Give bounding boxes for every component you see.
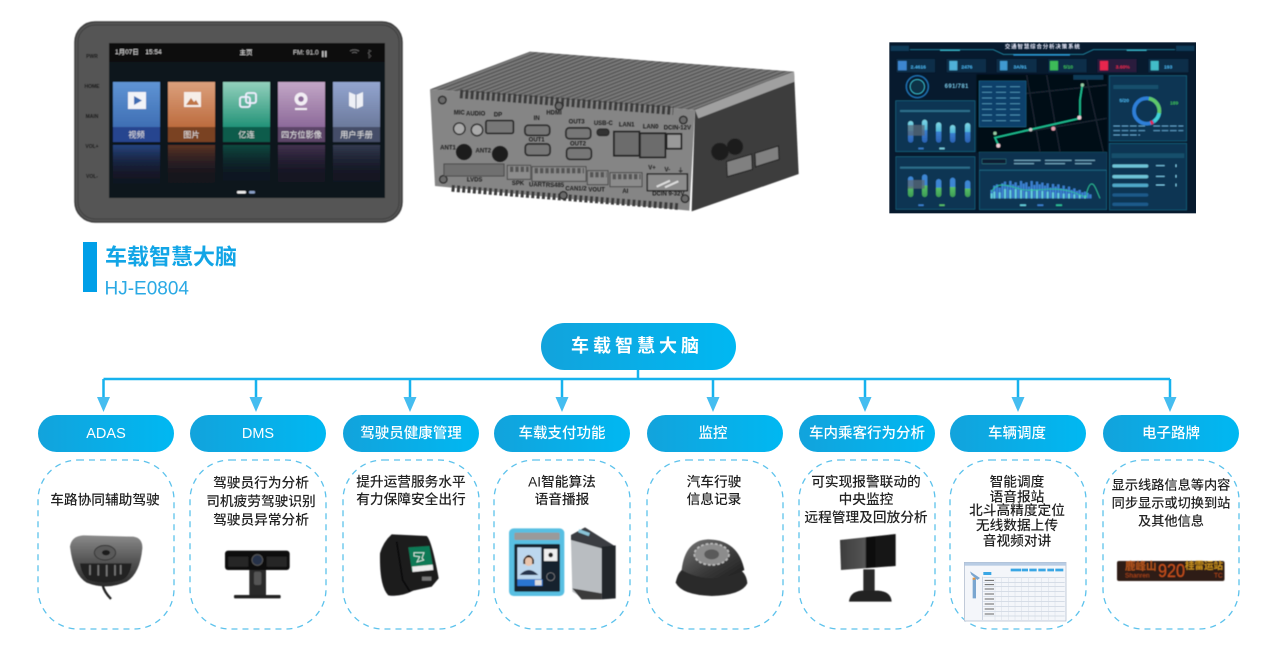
panel: payment <box>494 415 630 629</box>
text: passenger description: 中央监控 <box>839 492 894 507</box>
text: dispatch description: 北斗高精度定位 <box>969 502 1065 518</box>
text: route sign description: 同步显示或切换到站 <box>1112 494 1230 510</box>
heading: monitoring: 监控 <box>698 425 728 442</box>
app tile: pictures <box>168 82 215 187</box>
text: payment description: 语音播报 <box>535 491 590 507</box>
panel: ADAS <box>38 415 174 629</box>
vehicle computer box: OUT1 <box>529 138 545 144</box>
heading: passenger behaviour <box>799 415 935 452</box>
text: passenger description: 远程管理及回放分析 <box>804 509 928 525</box>
vehicle computer box: DCIN-12V <box>664 126 691 132</box>
text: ADAS description: 车路协同辅助驾驶 <box>50 492 160 508</box>
tablet screen: 1月07日 15:54 <box>115 48 162 56</box>
text: route sign description <box>1112 476 1230 528</box>
app tile: link <box>223 82 270 187</box>
icon: LED route sign <box>1117 560 1224 581</box>
text: payment description: AI智能算法 <box>528 474 596 490</box>
tablet screen <box>109 43 385 198</box>
text: DMS description: 驾驶员异常分析 <box>213 512 309 528</box>
text: monitoring description: 信息记录 <box>687 491 742 507</box>
vehicle computer box: ⏚ <box>678 167 684 174</box>
text: monitoring description <box>687 474 742 507</box>
text: health description: 有力保障安全出行 <box>356 491 466 507</box>
heading: driver health: 驾驶员健康管理 <box>360 424 462 442</box>
dashboard title: 交通智慧综合分析决策系统 <box>1005 43 1081 51</box>
heading: passenger behaviour: 车内乘客行为分析 <box>809 424 925 442</box>
vehicle computer box: IN <box>534 116 540 122</box>
dashboard KPI row: 2.4616 <box>911 64 926 70</box>
vehicle computer box: SPK <box>512 181 525 187</box>
app tile: four-way view: 四方位影像 <box>281 130 322 140</box>
text: payment description <box>528 474 596 507</box>
panel: passenger behaviour <box>799 415 935 629</box>
tablet device: MAIN <box>86 114 99 120</box>
dashboard gauge: 691/781 <box>945 84 969 90</box>
dashboard left bottom chart <box>896 157 975 209</box>
text: dispatch description: 音视频对讲 <box>983 532 1052 548</box>
icon: LED route sign: 920 <box>1158 561 1185 581</box>
vehicle computer box: RS485 <box>546 183 565 189</box>
model number: HJ-E0804 <box>104 278 189 300</box>
dashboard KPI row <box>897 59 1188 72</box>
heading: ADAS: ADAS <box>86 426 126 442</box>
app tile: video: 视频 <box>128 130 145 140</box>
dashboard area chart <box>979 170 1107 210</box>
heading: payment: 车载支付功能 <box>518 425 606 442</box>
root node: 车载智慧大脑: 车载智慧大脑 <box>571 335 703 356</box>
heading: vehicle dispatch: 车辆调度 <box>988 425 1046 442</box>
panel: electronic route sign <box>1103 415 1239 629</box>
tablet device: VOL+ <box>85 144 99 150</box>
text: monitoring description: 汽车行驶 <box>687 474 742 490</box>
product title block <box>83 242 237 300</box>
vehicle computer box: CAN1/2 <box>565 186 587 192</box>
tablet device: HOME <box>84 84 100 90</box>
vehicle computer box: DCIN 9-32V <box>652 192 684 198</box>
text: dispatch description: 语音报站 <box>990 488 1045 504</box>
vehicle computer box <box>430 52 799 211</box>
tablet screen: FM: 91.0 <box>293 50 319 56</box>
vehicle computer box: ANT1 <box>440 146 456 152</box>
dashboard KPI row: 2476 <box>961 65 973 71</box>
dashboard KPI row: 3A/91 <box>1013 65 1027 71</box>
heading: driver health <box>343 415 479 452</box>
dashboard screenshot <box>889 42 1196 213</box>
icon: health wristband <box>380 534 439 596</box>
dashboard info strip <box>979 152 1107 170</box>
heading: DMS: DMS <box>242 426 274 442</box>
dashboard ranking table <box>1109 143 1187 210</box>
app tile: four-way view <box>278 82 325 187</box>
text: route sign description: 显示线路信息等内容 <box>1112 476 1230 492</box>
heading: payment <box>494 415 630 452</box>
text: DMS description <box>206 474 316 528</box>
text: health description <box>356 474 466 507</box>
vehicle computer box: HDMI <box>546 110 562 116</box>
heading: ADAS <box>38 415 174 452</box>
connector tree with arrows <box>97 370 1176 412</box>
icon: LED route sign: TC <box>1214 572 1223 580</box>
app tile: user manual: 用户手册 <box>340 130 373 140</box>
dashboard KPI row: 193 <box>1164 65 1173 71</box>
tablet device: VOL- <box>86 174 98 180</box>
panel: DMS <box>190 415 326 629</box>
dashboard gauge <box>906 76 969 98</box>
icon: passenger camera <box>840 534 896 602</box>
text: DMS description: 驾驶员行为分析 <box>213 474 309 490</box>
text: passenger description: 可实现报警联动的 <box>811 474 921 490</box>
dashboard KPI row: 5/10 <box>1063 65 1073 71</box>
heading: vehicle dispatch <box>950 415 1086 452</box>
heading: DMS <box>190 415 326 452</box>
product name: 车载智慧大脑 <box>105 244 237 270</box>
icon: LED route sign: Shanren <box>1125 572 1150 580</box>
vehicle computer box: ANT2 <box>476 148 492 154</box>
dashboard donut chart: 5/20 <box>1119 98 1129 104</box>
text: dispatch description <box>969 474 1065 548</box>
dashboard left top chart <box>896 101 975 152</box>
app tile: link: 亿连 <box>238 130 255 140</box>
app tile: user manual <box>333 82 380 187</box>
dashboard route map <box>977 74 1107 152</box>
heading: monitoring <box>647 415 783 452</box>
icon: dome camera <box>676 539 747 596</box>
vehicle computer box: LAN1 <box>619 122 635 128</box>
vehicle computer box: UART <box>529 182 546 188</box>
vehicle computer box: V- <box>665 168 670 174</box>
icon: LED route sign: 桂雷运站 <box>1185 560 1224 572</box>
app tile: video <box>113 82 160 187</box>
text: dispatch description: 智能调度 <box>990 474 1045 490</box>
icon: DMS camera <box>225 551 290 598</box>
panel: vehicle dispatch <box>950 415 1086 629</box>
app tile: pictures: 图片 <box>183 130 200 140</box>
icon: LED route sign: 鹿峰山 <box>1125 560 1156 572</box>
icon: payment terminals <box>509 527 616 599</box>
vehicle computer box: VOUT <box>588 187 605 193</box>
text: dispatch description: 无线数据上传 <box>976 518 1058 533</box>
vehicle computer box: AUDIO <box>466 111 486 117</box>
vehicle computer box: USB-C <box>594 121 613 127</box>
text: passenger description <box>804 474 928 525</box>
panel: driver health <box>343 415 479 629</box>
heading: electronic route sign: 电子路牌 <box>1142 425 1200 442</box>
icon: ADAS camera <box>70 535 142 599</box>
vehicle computer box: LAN0 <box>643 124 659 130</box>
vehicle computer box: LVDS <box>467 178 482 184</box>
vehicle computer box: OUT2 <box>570 142 587 148</box>
text: health description: 提升运营服务水平 <box>356 474 466 490</box>
dashboard donut chart: 189 <box>1170 101 1179 107</box>
tablet device: PWR <box>86 54 98 60</box>
vehicle computer box: DP <box>494 112 502 118</box>
text: DMS description: 司机疲劳驾驶识别 <box>206 493 316 509</box>
vehicle computer box: AI <box>622 189 629 195</box>
tablet screen: 主页 <box>240 48 253 56</box>
heading: electronic route sign <box>1103 415 1239 452</box>
vehicle computer box: V+ <box>648 166 656 172</box>
vehicle computer box: OUT3 <box>569 119 585 125</box>
icon: dispatch software window <box>964 562 1066 621</box>
text: route sign description: 及其他信息 <box>1138 512 1204 528</box>
root node: 车载智慧大脑 <box>541 323 736 370</box>
dashboard KPI row: 3.60% <box>1116 65 1130 71</box>
vehicle computer box: MIC <box>454 110 465 116</box>
tablet device <box>75 22 402 222</box>
dashboard donut chart <box>1109 76 1187 141</box>
panel: monitoring <box>647 415 783 629</box>
